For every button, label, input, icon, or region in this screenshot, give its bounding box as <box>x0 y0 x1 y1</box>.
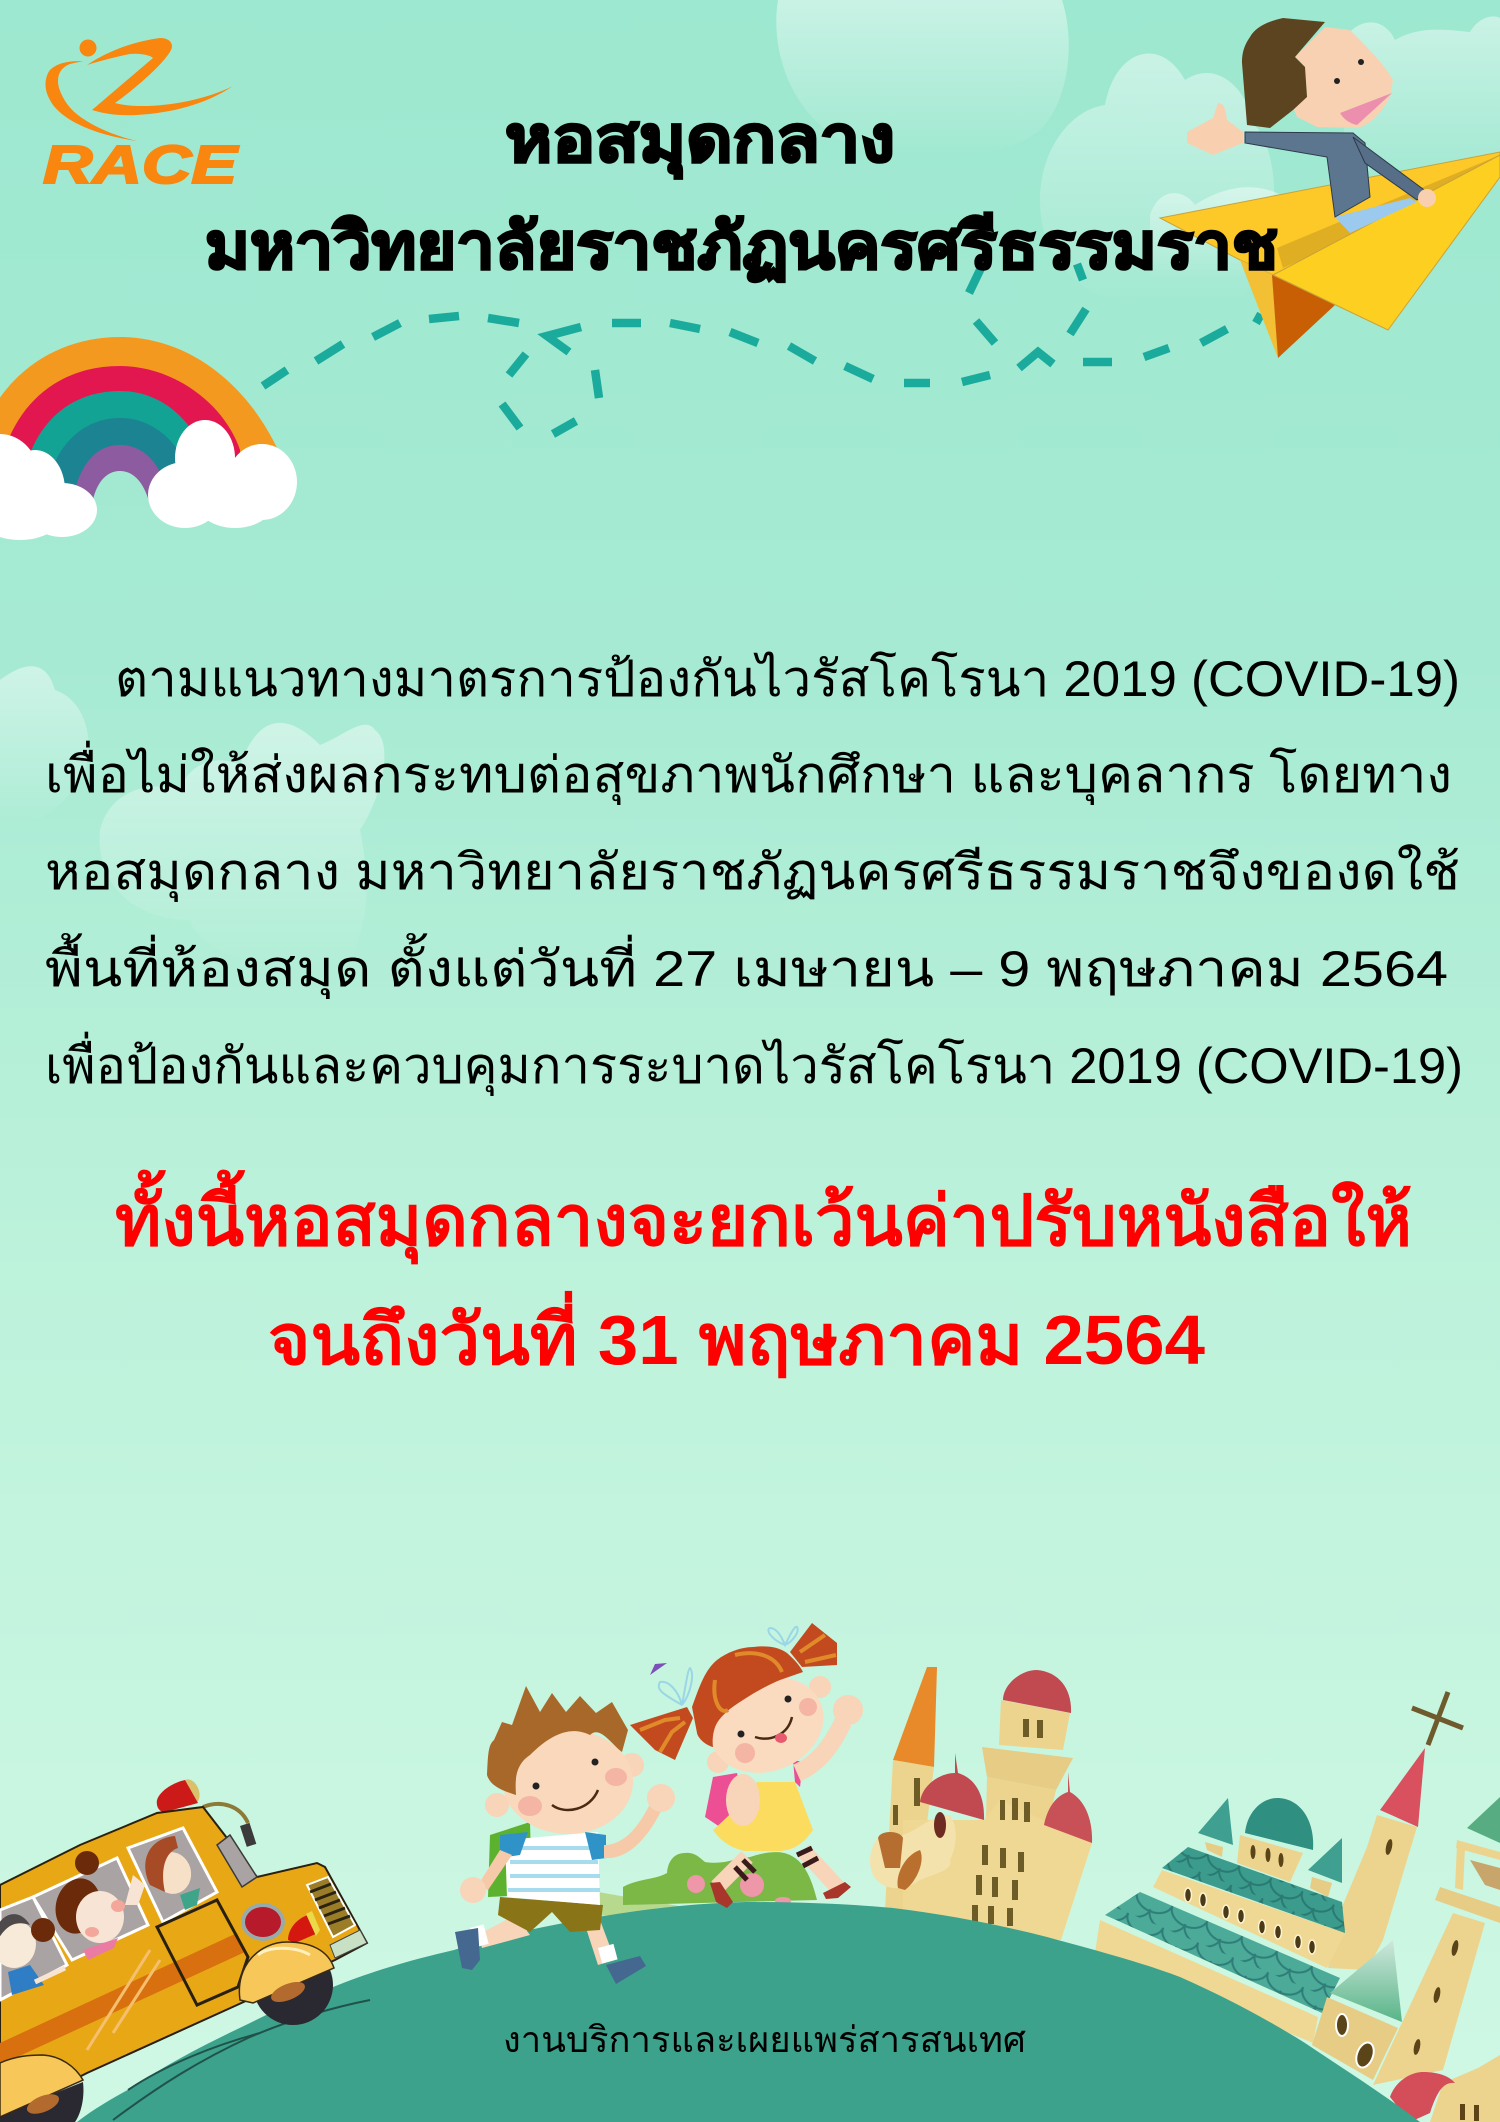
small green-spired house <box>1312 1940 1402 2080</box>
footer credit: งานบริการและเผยแพร่สารสนเทศ <box>503 2019 1026 2060</box>
rainbow with clouds <box>0 337 297 540</box>
rear wheel <box>0 2082 83 2122</box>
body paragraph: หอสมุดกลาง มหาวิทยาลัยราชภัฏนครศรีธรรมราชจึงของดใช้ <box>45 844 1460 902</box>
right cloud <box>148 420 297 528</box>
soft clouds, middle <box>0 666 384 968</box>
logo wordmark: RACE <box>43 135 240 195</box>
stop sign <box>241 1903 285 1941</box>
dog <box>870 1812 956 1890</box>
castle left <box>885 1667 1092 1940</box>
steeple tower <box>1328 1692 1463 1970</box>
bell tower <box>1373 1797 1500 2085</box>
title: มหาวิทยาลัยราชภัฏนครศรีธรรมราช <box>205 210 1278 282</box>
school bus <box>0 1777 367 2122</box>
left cloud <box>0 434 97 540</box>
domed cupola <box>1198 1798 1342 1897</box>
left pigtail <box>630 1707 693 1760</box>
dashed flight path <box>263 264 1261 434</box>
soft clouds, top <box>776 0 1500 311</box>
roof beacon <box>157 1777 203 1812</box>
red notice: จนถึงวันที่ 31 พฤษภาคม 2564 <box>268 1290 1205 1379</box>
tiled hall <box>1095 1847 1345 2043</box>
logo: RACE <box>43 38 240 195</box>
title <box>205 103 1278 282</box>
far-right building and red dome <box>1390 2055 1500 2122</box>
bush behind children <box>598 1852 817 1916</box>
bus window child 2 <box>50 1851 145 1960</box>
bus door <box>157 1900 248 2005</box>
boy on plane <box>1187 18 1436 233</box>
right pigtail <box>790 1623 837 1667</box>
bus mirror arm <box>203 1804 248 1823</box>
title: หอสมุดกลาง <box>505 103 895 179</box>
red notice <box>115 1169 1412 1379</box>
castle right <box>1095 1692 1500 2122</box>
hair cap <box>692 1646 803 1747</box>
paper plane <box>1160 152 1500 358</box>
road motion lines <box>113 2000 370 2120</box>
front wheel <box>253 1945 333 2025</box>
body paragraph: ตามแนวทางมาตรการป้องกันไวรัสโคโรนา 2019 (COVID-19) <box>115 651 1460 707</box>
bus window child 1 <box>145 1836 200 1910</box>
body paragraph: พื้นที่ห้องสมุด ตั้งแต่วันที่ 27 เมษายน – 9 พฤษภาคม 2564 <box>45 933 1448 999</box>
red notice: ทั้งนี้หอสมุดกลางจะยกเว้นค่าปรับหนังสือให้ <box>115 1169 1412 1265</box>
body paragraph: เพื่อไม่ให้ส่งผลกระทบต่อสุขภาพนักศึกษา และบุคลากร โดยทาง <box>45 741 1452 805</box>
girl walking <box>630 1623 863 1908</box>
green hill <box>77 1902 1420 2122</box>
boy walking <box>455 1686 675 1984</box>
body paragraph: เพื่อป้องกันและควบคุมการระบาดไวรัสโคโรนา 2019 (COVID-19) <box>45 1032 1463 1096</box>
bus window child 3 <box>0 1914 65 1995</box>
body paragraph <box>45 651 1463 1096</box>
